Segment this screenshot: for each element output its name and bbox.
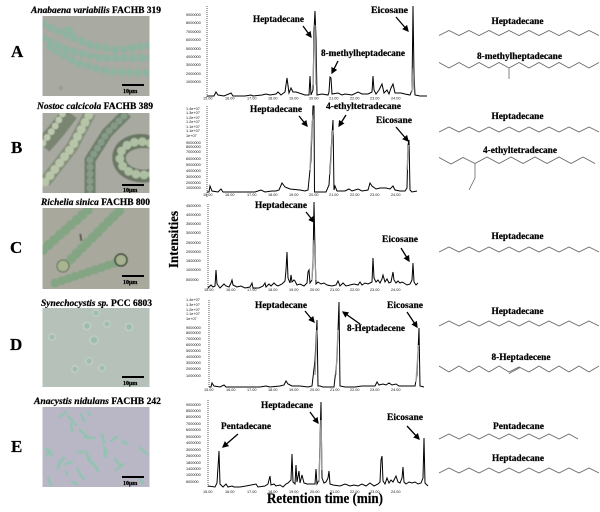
species title B: Nostoc calcicola FACHB 389: [36, 101, 154, 111]
peak label Eicosane: Eicosane: [387, 300, 423, 310]
micrograph C: 10μm: [123, 280, 137, 286]
structure: Heptadecane B: [439, 111, 599, 132]
chromatogram E: 5000000: [186, 435, 201, 439]
chromatogram E: 17.00: [247, 490, 257, 494]
chromatogram D: 6000000: [186, 343, 201, 347]
chromatogram B: 1.1e+07: [186, 125, 200, 129]
peak label Heptadecane: Heptadecane: [255, 300, 307, 310]
chromatogram E: 24.00: [391, 490, 401, 494]
micrograph A: 10μm: [123, 89, 137, 95]
chromatogram E: 21.00: [330, 490, 340, 494]
chromatogram C: 4500000: [186, 204, 201, 208]
chromatogram B: [186, 101, 417, 198]
arrow to Pentadecane: [223, 434, 238, 447]
chromatogram B: 8000000: [186, 145, 201, 149]
peak label Heptadecane: Heptadecane: [255, 200, 307, 210]
chromatogram B: 21.00: [329, 193, 339, 197]
chromatogram C: 2000000: [186, 250, 201, 254]
arrow to Heptadecane: [299, 116, 307, 126]
chromatogram B: 1.2e+07: [186, 116, 200, 120]
chromatogram C: 20.00: [310, 288, 320, 292]
arrow to Eicosane: [396, 127, 408, 141]
chromatogram C: 3500000: [186, 222, 201, 226]
arrow to Eicosane: [407, 426, 419, 439]
peak label 8-Heptadecene: 8-Heptadecene: [347, 323, 405, 333]
structure: 4-ethyltetradecane: [439, 145, 595, 190]
arrow to Eicosane: [401, 248, 409, 261]
chromatogram C: 1000000: [186, 268, 201, 272]
peak label 8-methylheptadecane: 8-methylheptadecane: [321, 48, 405, 58]
chromatogram C: 18.00: [268, 288, 278, 292]
structure: 8-Heptadecene: 8-Heptadecene: [492, 352, 551, 362]
chromatogram E: 3000000: [186, 448, 201, 452]
peak label Eicosane: Eicosane: [371, 5, 408, 15]
structure: 8-methylheptadecane: [439, 51, 599, 79]
structure: Heptadecane E: [439, 453, 599, 473]
chromatogram D: 18.00: [268, 388, 278, 392]
chromatogram D: 23.00: [370, 388, 380, 392]
chromatogram D: 19.00: [289, 388, 299, 392]
structure: Heptadecane E: Heptadecane: [492, 453, 544, 463]
peak label Pentadecane: Pentadecane: [221, 421, 271, 431]
row D: Synechocystis: [10, 298, 153, 390]
chromatogram E: 6000000: [186, 428, 201, 432]
chromatogram A: [186, 5, 427, 100]
arrow to Heptadecane: [305, 311, 314, 322]
micrograph E: 10μm: [123, 481, 137, 487]
peak label Eicosane: Eicosane: [382, 234, 418, 244]
chromatogram A: 2000000: [186, 72, 201, 76]
chromatogram B: 1.3e+07: [186, 111, 200, 115]
arrow to 8-Heptadecene: [343, 312, 360, 324]
chromatogram D: 7000000: [186, 337, 201, 341]
chromatogram B: 1.4e+07: [186, 107, 200, 111]
chromatogram E: 22.00: [350, 490, 360, 494]
chromatogram B: 1.2e+07: [186, 120, 200, 124]
structure: Heptadecane A: Heptadecane: [492, 16, 544, 26]
chromatogram B: 6000000: [186, 157, 201, 161]
chromatogram D: 1e+07: [186, 317, 197, 321]
chromatogram B: 18.00: [268, 193, 278, 197]
species title E: Anacystis nidulans FACHB 242: [33, 396, 162, 406]
micrograph C: [42, 208, 150, 289]
chromatogram D: 8000000: [186, 331, 201, 335]
chromatogram D: [186, 298, 424, 392]
arrow to 8-methylheptadecane: [332, 61, 338, 73]
chromatogram D: 16.00: [226, 388, 236, 392]
species title D: Synechocystis sp. PCC 6803: [41, 298, 153, 308]
arrow to Heptadecane: [303, 26, 311, 37]
peak label Heptadecane: Heptadecane: [261, 400, 313, 410]
chromatogram D: 1000000: [186, 374, 201, 378]
chromatogram A: 5000000: [186, 47, 201, 51]
arrow to Heptadecane: [310, 412, 318, 423]
chromatogram E: 20.00: [310, 490, 320, 494]
panel label D: D: [10, 335, 22, 354]
chromatogram A: 24.00: [391, 96, 401, 100]
chromatogram D: 5000000: [186, 349, 201, 353]
chromatogram C: [186, 200, 418, 292]
species title A: Anabaena variabilis FACHB 319: [30, 5, 162, 15]
chromatogram A: 21.00: [329, 96, 339, 100]
chromatogram B: 16.00: [225, 193, 235, 197]
chromatogram A: 19.00: [289, 96, 299, 100]
chromatogram B: 5000000: [186, 163, 201, 167]
x-axis title: Retention time (min): [267, 491, 383, 507]
chromatogram E: 8000000: [186, 415, 201, 419]
chromatogram B: 7000000: [186, 150, 201, 154]
chromatogram B: 22.00: [350, 193, 360, 197]
chromatogram E: 2600000: [186, 454, 201, 458]
chromatogram B: 9000000: [186, 141, 201, 145]
chromatogram A: 4000000: [186, 55, 201, 59]
chromatogram C: 16.00: [226, 288, 236, 292]
chromatogram B: 19.00: [289, 193, 299, 197]
micrograph B: 10μm: [123, 188, 137, 194]
chromatogram E: 15.00: [203, 490, 213, 494]
chromatogram E: 1400000: [186, 467, 201, 471]
peak label Eicosane: Eicosane: [387, 412, 423, 422]
chromatogram B: 1.1e+07: [186, 129, 200, 133]
structure: Heptadecane B: Heptadecane: [492, 111, 544, 121]
chromatogram C: 500000: [186, 278, 199, 282]
chromatogram E: [186, 400, 428, 494]
chromatogram D: 1.4e+07: [186, 298, 200, 302]
micrograph D: 10μm: [123, 381, 137, 387]
chromatogram D: 15.00: [204, 388, 214, 392]
chromatogram B: 23.00: [370, 193, 380, 197]
structure: 8-methylheptadecane: 8-methylheptadecane: [477, 51, 562, 61]
chromatogram D: 1.2e+07: [186, 308, 200, 312]
peak label 4-ethyltetradecane: 4-ethyltetradecane: [326, 101, 401, 111]
chromatogram B: 1000000: [186, 186, 201, 190]
panel label A: A: [11, 42, 24, 61]
panel label C: C: [10, 238, 22, 257]
chromatogram E: 23.00: [370, 490, 380, 494]
chromatogram A: 6000000: [186, 38, 201, 42]
chromatogram C: 21.00: [330, 288, 340, 292]
chromatogram D: 1.1e+07: [186, 312, 200, 316]
chromatogram B: 1e+07: [186, 134, 197, 138]
chromatogram E: 9000000: [186, 403, 201, 407]
chromatogram E: 1000000: [186, 473, 201, 477]
chromatogram D: 21.00: [330, 388, 340, 392]
structure: Pentadecane: Pentadecane: [493, 421, 544, 431]
chromatogram D: 1.3e+07: [186, 303, 200, 307]
chromatogram A: 23.00: [370, 96, 380, 100]
row C: Richelia sinica: [10, 197, 152, 291]
micrograph B: [42, 113, 150, 193]
panel label B: B: [11, 138, 22, 157]
chromatogram B: 4000000: [186, 169, 201, 173]
chromatogram E: 8500000: [186, 409, 201, 413]
chromatogram A: 3000000: [186, 63, 201, 67]
row A: Anabaena variabilis: [11, 5, 162, 98]
micrograph D: [42, 308, 150, 387]
chromatogram D: 2000000: [186, 367, 201, 371]
chromatogram C: 23.00: [370, 288, 380, 292]
chromatogram E: 1800000: [186, 461, 201, 465]
structure: Pentadecane: [439, 421, 578, 439]
structure: Heptadecane D: Heptadecane: [492, 306, 544, 316]
chromatogram B: 2000000: [186, 181, 201, 185]
arrow to 4-ethyltetradecane: [339, 115, 346, 126]
chromatogram D: 4000000: [186, 355, 201, 359]
chromatogram B: 24.00: [391, 193, 401, 197]
chromatogram B: 17.00: [247, 193, 257, 197]
chromatogram A: 9000000: [186, 13, 201, 17]
chromatogram E: 16.00: [225, 490, 235, 494]
arrow to Eicosane: [396, 17, 408, 31]
chromatogram A: 15.00: [203, 96, 213, 100]
chromatogram A: 20.00: [309, 96, 319, 100]
chromatogram C: 24.00: [391, 288, 401, 292]
peak label Eicosane: Eicosane: [376, 115, 412, 125]
structure: Heptadecane C: Heptadecane: [492, 231, 544, 241]
chromatogram D: 17.00: [247, 388, 257, 392]
chromatogram E: 19.00: [289, 490, 299, 494]
structure: Heptadecane A: [439, 16, 599, 36]
chromatogram C: 19.00: [289, 288, 299, 292]
structure: Heptadecane D: [439, 306, 599, 326]
panel label E: E: [11, 437, 22, 456]
chromatogram A: 22.00: [350, 96, 360, 100]
row B: Nostoc calcicola: [11, 101, 154, 196]
chromatogram D: 24.00: [391, 388, 401, 392]
chromatogram B: 15.00: [203, 193, 213, 197]
chromatogram A: 16.00: [225, 96, 235, 100]
micrograph E: [42, 407, 150, 487]
chromatogram A: 8000000: [186, 21, 201, 25]
chromatogram C: 2500000: [186, 241, 201, 245]
peak label Heptadecane: Heptadecane: [250, 104, 302, 114]
chromatogram E: 600000: [186, 480, 199, 484]
chromatogram E: 7000000: [186, 422, 201, 426]
chromatogram C: 1500000: [186, 259, 201, 263]
peak label Heptadecane: Heptadecane: [253, 14, 304, 24]
species title C: Richelia sinica FACHB 800: [40, 197, 151, 207]
chromatogram D: 3000000: [186, 361, 201, 365]
structure: 8-Heptadecene: [439, 352, 599, 374]
chromatogram C: 4000000: [186, 213, 201, 217]
row E: Anacystis nidulans: [11, 396, 162, 490]
chromatogram B: 20.00: [309, 193, 319, 197]
chromatogram C: 15.00: [204, 288, 214, 292]
micrograph A: [40, 14, 152, 98]
chromatogram C: 22.00: [350, 288, 360, 292]
chromatogram C: 17.00: [247, 288, 257, 292]
chromatogram E: 4000000: [186, 441, 201, 445]
structure: 4-ethyltetradecane: 4-ethyltetradecane: [483, 145, 557, 155]
arrow to Eicosane: [407, 312, 417, 327]
arrow to Heptadecane: [306, 212, 314, 222]
structure: Heptadecane C: [439, 231, 599, 252]
y-axis title: Intensities: [167, 210, 182, 268]
chromatogram C: 3000000: [186, 231, 201, 235]
chromatogram D: 22.00: [350, 388, 360, 392]
chromatogram E: 18.00: [268, 490, 278, 494]
chromatogram A: 1000000: [186, 80, 201, 84]
chromatogram A: 7000000: [186, 30, 201, 34]
chromatogram A: 17.00: [247, 96, 257, 100]
chromatogram D: 20.00: [310, 388, 320, 392]
chromatogram A: 18.00: [268, 96, 278, 100]
chromatogram B: 3000000: [186, 175, 201, 179]
chromatogram D: 9000000: [186, 326, 201, 330]
